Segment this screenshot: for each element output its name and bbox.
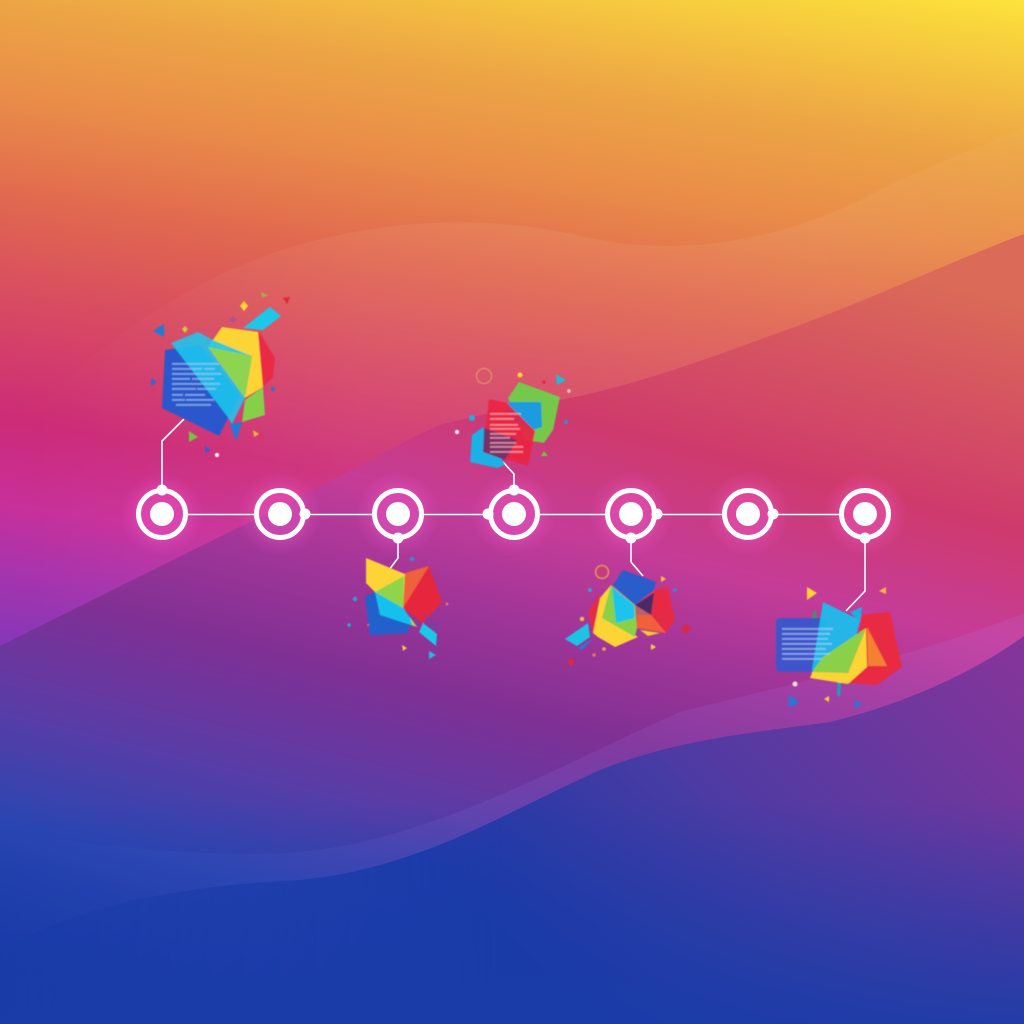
timeline nodes: [138, 484, 888, 544]
confetti: [807, 587, 817, 600]
node glows: [120, 472, 907, 556]
confetti: [402, 645, 407, 651]
confetti: [153, 324, 164, 337]
node 3: [374, 490, 422, 544]
background wash: bottom fade: [0, 800, 1024, 1024]
confetti: [588, 588, 592, 592]
node 6: [724, 490, 778, 538]
node 7: [842, 490, 888, 544]
background wave: light upper band: [0, 128, 1024, 660]
background wave: upper edge of the darker field: [0, 234, 1024, 1024]
node 1: [138, 484, 186, 538]
confetti: [518, 372, 522, 378]
cluster 1: document with polygons: [151, 292, 290, 457]
node 4: [482, 484, 538, 538]
document text lines: [172, 363, 221, 406]
document text lines: [490, 413, 523, 453]
cluster 5: blue document with polygons: [776, 587, 902, 708]
outline icon: [476, 368, 492, 384]
outline icon: [596, 566, 608, 578]
background wave: deep lower field: [158, 636, 1024, 998]
node 2: [256, 490, 310, 538]
timeline connector lines: [162, 419, 865, 611]
document text lines: [782, 628, 833, 660]
cluster 2: red document with green and cyan cards: [455, 368, 571, 468]
background wave: light lower band: [0, 613, 1024, 1024]
cluster 3: yellow, red and blue polygons: [347, 557, 448, 659]
node 5: [608, 490, 662, 544]
cluster 4: cube of polygons: [565, 566, 691, 666]
